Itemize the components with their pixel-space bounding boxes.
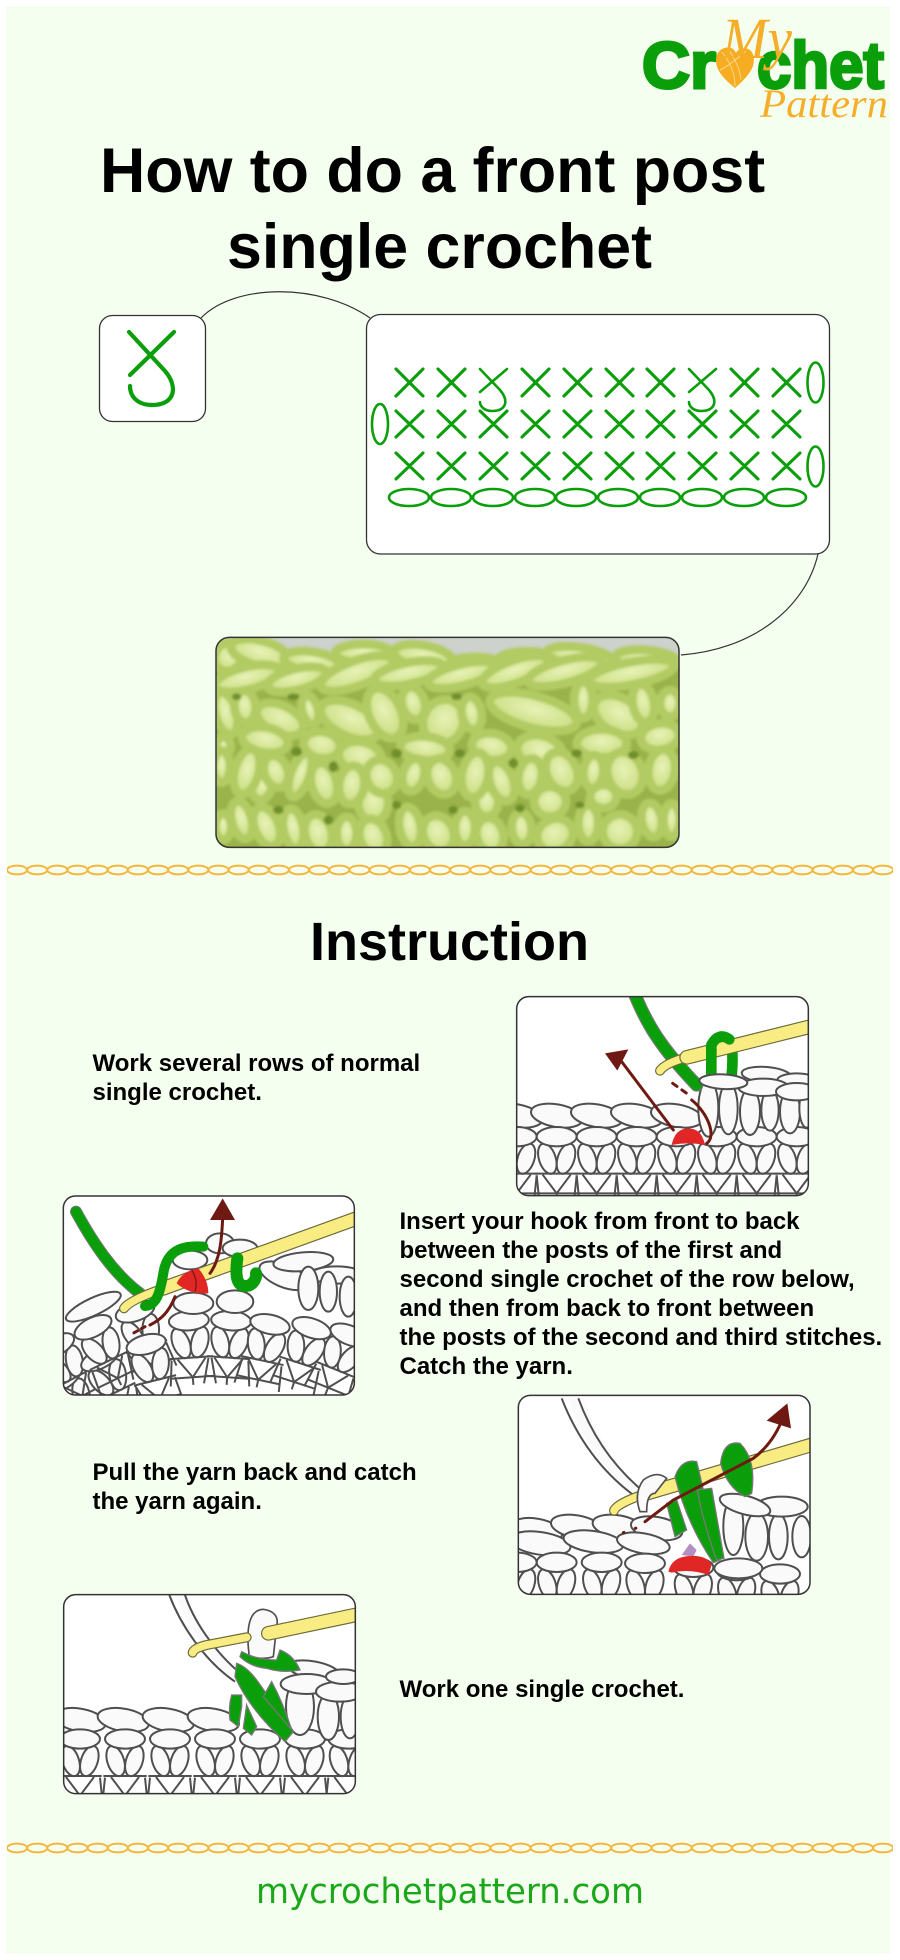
- icon: yarn heart: [716, 48, 754, 88]
- white loop behind hook: [248, 1609, 277, 1658]
- step 4 image: [14, 1595, 371, 1803]
- red stitch: [672, 1128, 705, 1145]
- logo: My Crochet Pattern: chet: [757, 28, 884, 102]
- step 4 text: Work one single crochet.: [400, 1676, 684, 1703]
- logo: My Crochet Pattern: Cr: [642, 28, 716, 102]
- title: single crochet: [227, 212, 652, 282]
- stitches: [682, 1543, 697, 1557]
- divider: bottom chain: [7, 1840, 893, 1856]
- fabric rows: [489, 1065, 819, 1201]
- divider: top chain: [7, 862, 893, 878]
- step 2 text: and then from back to front between: [400, 1295, 814, 1322]
- photo: crochet swatch: [208, 633, 681, 858]
- yarn strand: [635, 995, 697, 1085]
- arrow: [622, 1062, 673, 1130]
- crochet hook: [660, 1057, 687, 1071]
- green stitch: [240, 1650, 300, 1671]
- step 3 image: [518, 1394, 811, 1596]
- step 2 text: Catch the yarn.: [400, 1353, 573, 1380]
- title: [100, 136, 765, 282]
- row of X stitches: bottom: [396, 453, 800, 479]
- panel: stitch symbol: [100, 316, 206, 422]
- foundation chain: [389, 489, 806, 506]
- title: How to do a front post: [100, 136, 765, 206]
- step 1 text: Work several rows of normal: [92, 1050, 420, 1077]
- green loops: [667, 1500, 687, 1537]
- step 1 text: single crochet.: [92, 1079, 262, 1106]
- crochet hook: [124, 1288, 163, 1308]
- white loop on hook: [637, 1475, 667, 1512]
- step 1 image: [516, 996, 810, 1196]
- step 2 text: Insert your hook from front to back: [400, 1208, 800, 1235]
- row of X stitches: middle: [396, 411, 800, 437]
- step 2 image: [62, 1195, 356, 1396]
- shadows between stitches: [232, 693, 639, 825]
- turning chains: [372, 362, 824, 486]
- footer url: mycrochetpattern.com: [256, 1872, 644, 1912]
- red stitch: [177, 1268, 208, 1294]
- yarn loop on hook: [711, 1037, 729, 1077]
- logo: My Crochet Pattern: My: [721, 6, 792, 71]
- step 3 text: the yarn again.: [92, 1488, 262, 1515]
- arrow: [210, 1218, 223, 1273]
- curved fabric: [31, 1233, 374, 1447]
- step 2 text: the posts of the second and third stitches.: [400, 1324, 882, 1351]
- crochet hook: [614, 1493, 647, 1511]
- step 2 text: between the posts of the first and: [400, 1237, 782, 1264]
- step 2 text: second single crochet of the row below,: [400, 1266, 855, 1293]
- connector: symbol to chart: [201, 292, 370, 318]
- yarn strand: [76, 1212, 140, 1293]
- yarn loops: [145, 1246, 203, 1306]
- fabric rows: [494, 1398, 811, 1638]
- heading: Instruction: Instruction: [310, 912, 589, 972]
- fabric rows: [14, 1595, 371, 1803]
- panel: stitch chart: [366, 314, 830, 554]
- logo: My Crochet Pattern: [642, 6, 888, 126]
- arrow: [645, 1417, 783, 1522]
- hooked stitches: [480, 369, 716, 411]
- yarn loop, back leg: [726, 1052, 738, 1076]
- icon: front post single crochet symbol: [129, 332, 174, 405]
- crochet hook: [268, 1614, 360, 1633]
- row of X stitches: top: [396, 369, 800, 396]
- connector: chart to photo: [681, 554, 818, 655]
- step 3 text: Pull the yarn back and catch: [92, 1459, 417, 1486]
- logo: My Crochet Pattern: Pattern: [759, 81, 888, 126]
